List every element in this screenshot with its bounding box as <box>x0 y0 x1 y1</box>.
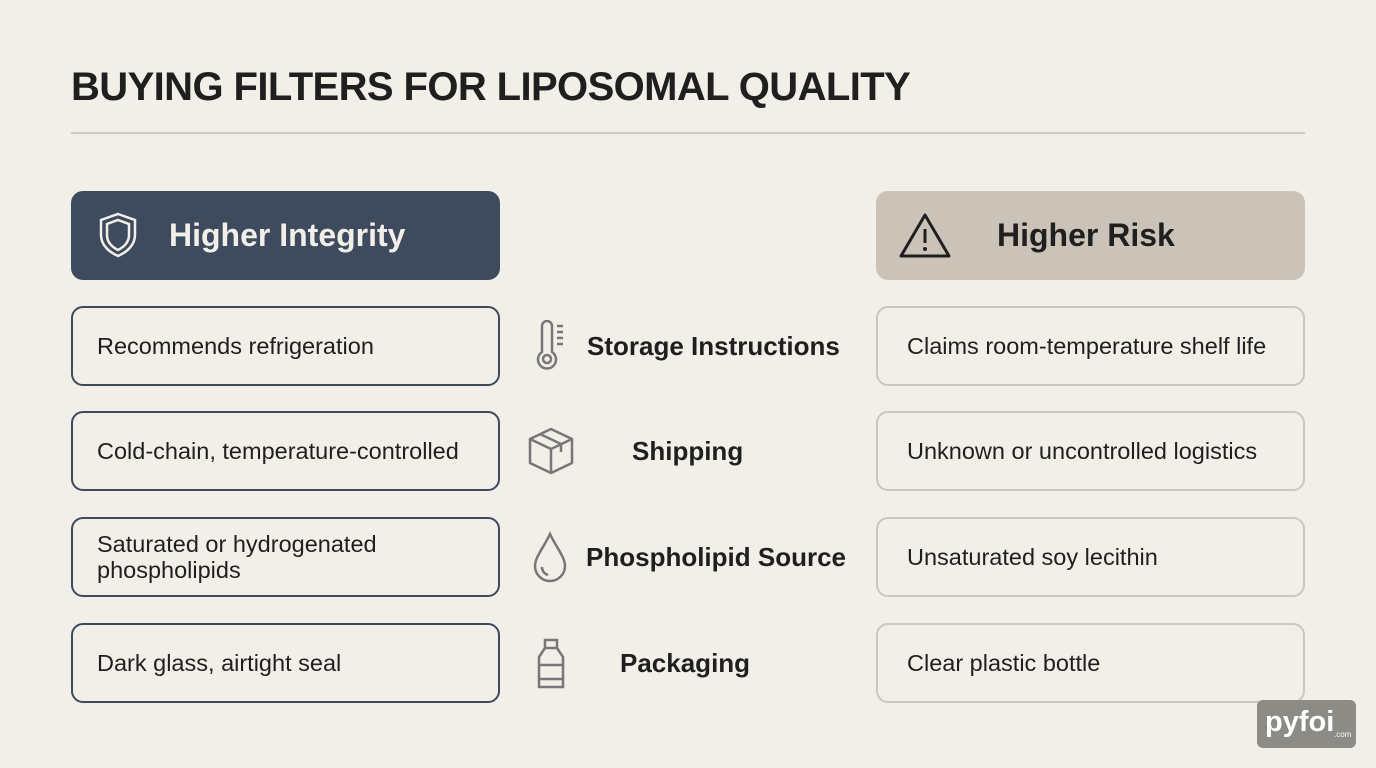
row 3: phospholipids <box>97 557 241 583</box>
icon: box <box>528 428 574 474</box>
header: higher integrity: Higher Integrity <box>169 217 405 253</box>
text: Packaging <box>620 648 750 678</box>
text: Phospholipid Source <box>586 542 846 572</box>
row 4: Dark glass, airtight seal <box>97 650 341 676</box>
icon: shield <box>100 212 136 258</box>
text: Clear plastic bottle <box>907 650 1100 676</box>
row 2 <box>71 411 500 491</box>
header: higher risk <box>876 191 1305 280</box>
logo: pyfoi <box>1265 706 1334 738</box>
icon: drop <box>534 531 566 582</box>
row 1 <box>71 306 500 386</box>
row 4 <box>71 623 500 703</box>
logo: .com <box>1334 730 1351 739</box>
icon: bottle <box>538 638 564 688</box>
header: higher integrity <box>71 191 500 280</box>
logo <box>1257 700 1356 748</box>
text: Storage Instructions <box>587 330 840 360</box>
text: Unknown or uncontrolled logistics <box>907 438 1257 464</box>
row 3: Saturated or hydrogenated <box>97 531 377 557</box>
text: Unsaturated soy lecithin <box>907 544 1158 570</box>
row 2: Cold-chain, temperature-controlled <box>97 438 459 464</box>
row 3 <box>71 517 500 597</box>
icon: thermometer <box>536 320 563 370</box>
text: Claims room-temperature shelf life <box>907 333 1266 359</box>
icon: warning <box>900 213 951 258</box>
row 1: Recommends refrigeration <box>97 333 374 359</box>
header: higher risk: Higher Risk <box>997 217 1175 253</box>
title: BUYING FILTERS FOR LIPOSOMAL QUALITY <box>71 65 910 109</box>
text: Shipping <box>632 436 743 466</box>
